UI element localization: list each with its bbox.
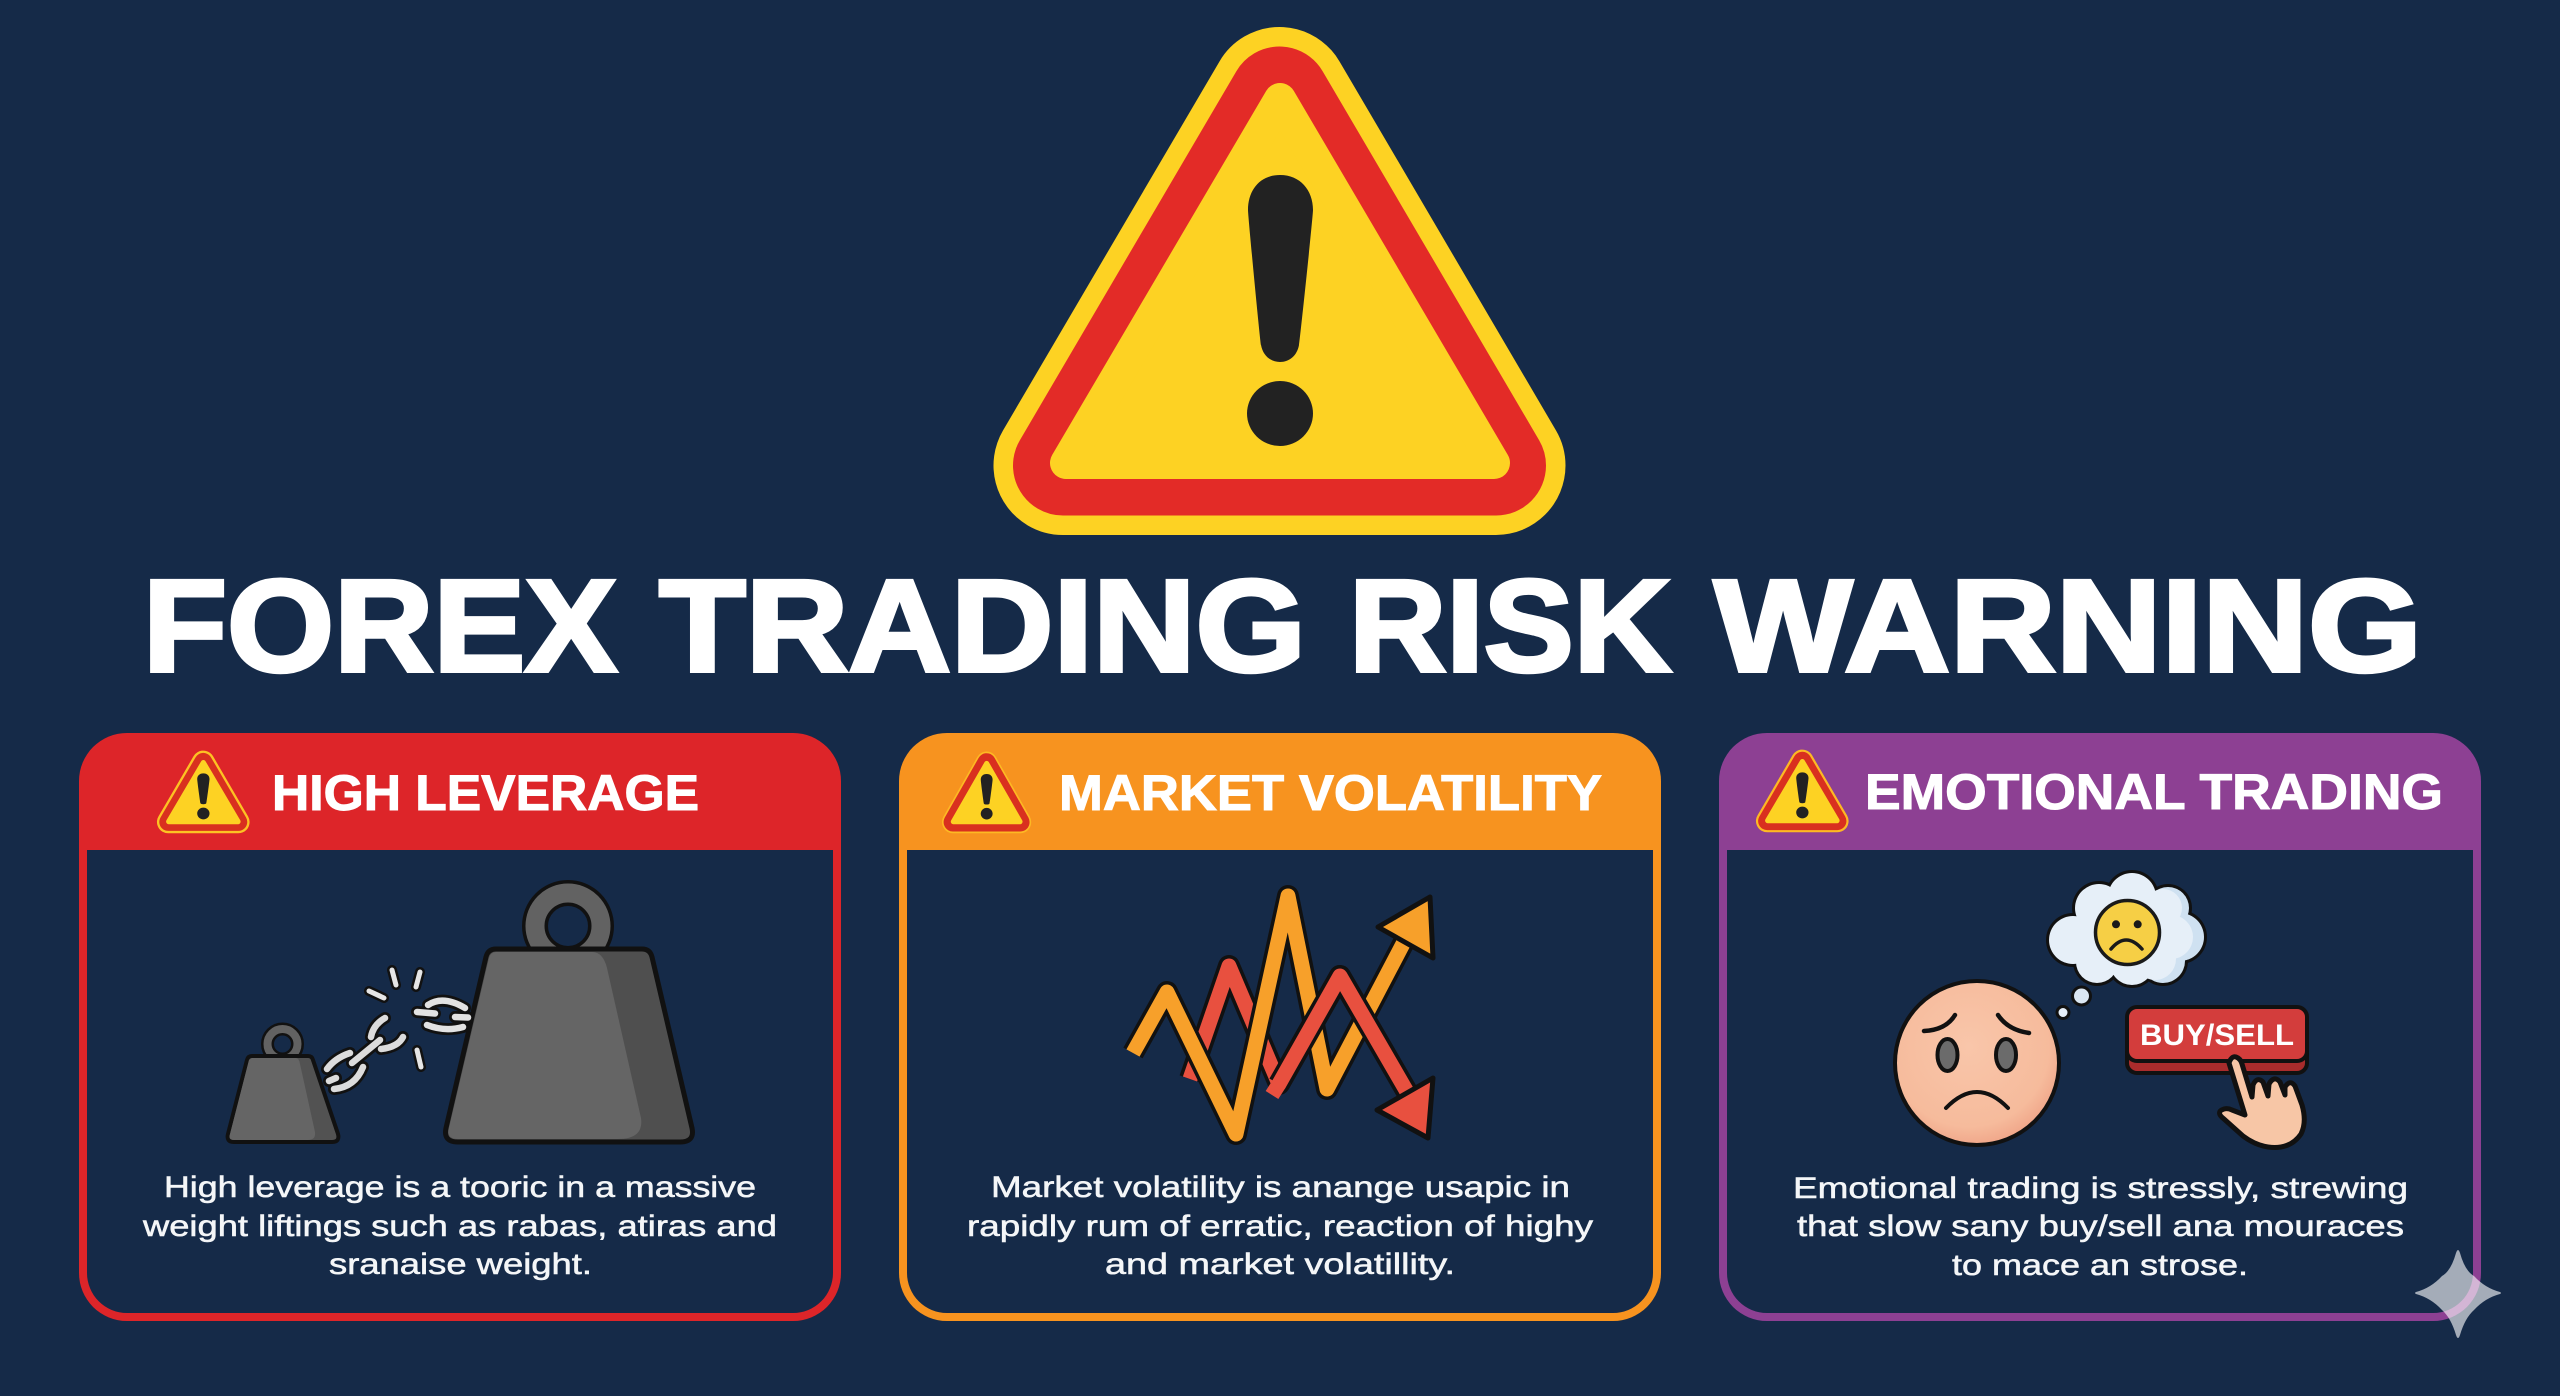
- title: FOREX: [143, 552, 617, 699]
- description: high leverage: weight liftings such as rabas, atiras and: [142, 1210, 777, 1243]
- illustration: volatile arrows: [1133, 896, 1433, 1138]
- illustration: sad face: [1895, 981, 2059, 1145]
- description: market volatility: rapidly rum of erratic, reaction of highy: [967, 1210, 1593, 1243]
- panel: market volatility: [899, 733, 1661, 1321]
- panel: emotional trading: [1719, 733, 2481, 1321]
- illustration: thought cloud with sad emoji: [2046, 870, 2207, 1018]
- icon: large warning triangle: [1063, 96, 1496, 466]
- panel: high leverage: [79, 733, 841, 1321]
- title: RISK: [1349, 552, 1671, 699]
- description: market volatility: [967, 1171, 1593, 1281]
- panel frame and header: emotional trading: [1719, 733, 2481, 1321]
- panel frame and header: high leverage: [79, 733, 841, 1321]
- description: emotional trading: [1793, 1172, 2408, 1282]
- description: high leverage: sranaise weight.: [329, 1248, 592, 1281]
- title: WARNING: [1714, 552, 2422, 699]
- description: emotional trading: that slow sany buy/sell ana mouraces: [1797, 1210, 2404, 1243]
- chain right fragment: [417, 1001, 468, 1029]
- description: market volatility: and market volatillity.: [1105, 1248, 1455, 1281]
- description: high leverage: High leverage is a tooric in a massive: [164, 1171, 756, 1204]
- description: emotional trading: Emotional trading is stressly, strewing: [1793, 1172, 2408, 1205]
- icon: pointing hand: [2220, 1057, 2304, 1147]
- small weight: [228, 1029, 338, 1142]
- icon: small warning triangle: [1767, 761, 1837, 821]
- break sparks: [369, 970, 421, 1067]
- title: TRADING: [659, 552, 1306, 699]
- orange arrow: [1133, 896, 1433, 1134]
- description: high leverage: [142, 1171, 777, 1281]
- description: market volatility: Market volatility is anange usapic in: [991, 1171, 1570, 1204]
- panel frame and header: market volatility: [899, 733, 1661, 1321]
- big weight: [446, 893, 692, 1142]
- icon: watermark sparkle: [2415, 1250, 2501, 1338]
- heading: market volatility: MARKET VOLATILITY: [1059, 765, 1602, 821]
- chain left fragment: [327, 1018, 403, 1089]
- red arrow, front: [1272, 976, 1433, 1138]
- heading: emotional trading: EMOTIONAL TRADING: [1865, 764, 2443, 820]
- icon: small warning triangle: [953, 763, 1020, 822]
- illustration: buy/sell button: [2127, 1007, 2307, 1073]
- red line, back: [1190, 966, 1410, 1097]
- illustration: weights and broken chain: [228, 893, 692, 1142]
- description: emotional trading: to mace an strose.: [1952, 1249, 2248, 1282]
- icon: small warning triangle: [168, 762, 238, 822]
- heading: high leverage: HIGH LEVERAGE: [272, 765, 699, 821]
- illustration: buy/sell button: BUY/SELL: [2140, 1019, 2294, 1052]
